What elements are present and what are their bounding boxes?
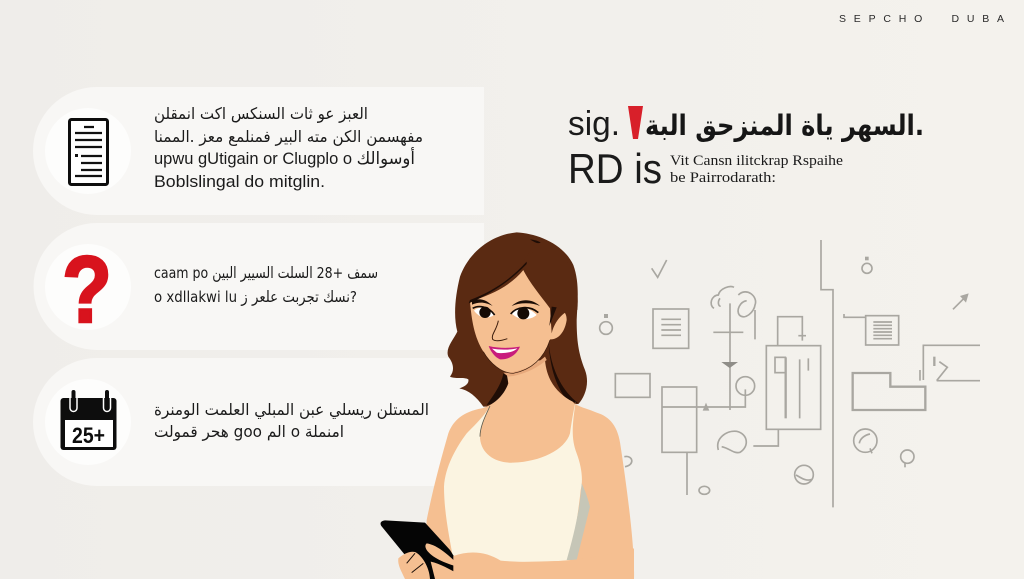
icon: calendar 25+	[60, 392, 116, 450]
icon: ring right	[862, 257, 872, 273]
nose	[492, 321, 507, 341]
subtitle: be Pairrodarath:	[670, 170, 776, 186]
tank top	[444, 401, 582, 563]
icon: document right	[844, 314, 899, 345]
icon: ring left	[600, 314, 612, 334]
text: document card body: upwu gUtigain or Clugplo o أوسوالك	[154, 147, 415, 168]
text: document card body: مفهسمن الكن مته البير فمنلمع معز .الممنا	[154, 127, 423, 147]
text: question card body	[154, 264, 378, 306]
bracket and sigma	[920, 345, 980, 381]
heading block	[568, 105, 924, 192]
panel: document card	[33, 87, 484, 215]
tablet	[381, 520, 459, 579]
main vertical divider	[821, 240, 833, 507]
icon: calendar 25+: 25+	[72, 423, 105, 448]
hand	[398, 543, 459, 579]
red exclamation wedge	[628, 106, 643, 139]
icon: check mark	[652, 260, 667, 277]
subtitle	[670, 153, 843, 186]
tank with pipe	[662, 377, 755, 495]
eyes	[472, 299, 540, 319]
panel: calendar card	[33, 358, 484, 486]
header brand label: SEPCHO DUBA	[839, 13, 1004, 25]
text: document card body: Boblslingal do mitglin.	[154, 172, 325, 191]
icon: document	[70, 120, 108, 184]
text: calendar card body: هحر قمولت goo الم o امنملة	[154, 422, 344, 442]
subtitle: Vit Cansn ilitckrap Rspaihe	[670, 153, 843, 169]
face	[470, 270, 553, 373]
mouth	[489, 346, 520, 359]
lower arm and palm	[453, 548, 634, 579]
box left	[615, 374, 650, 397]
text: document card body: العبز عو ثات السنكس اكت انمقلن	[154, 104, 368, 124]
cabinet	[753, 317, 821, 446]
top shadow	[567, 483, 590, 560]
fringe	[458, 236, 536, 320]
icon: arrow	[953, 293, 969, 309]
illustration: woman with tablet	[381, 232, 634, 579]
text: question card body: o xdllakwi lu نسك تجربت علعر ز?	[154, 288, 357, 306]
diagram: line-art schematic	[600, 240, 980, 507]
icon: document left	[653, 309, 689, 348]
text: calendar card body: المستلن ريسلي عبن المبلي العلمت الومنرة	[154, 400, 429, 420]
arms and neck skin	[425, 360, 634, 579]
text: document card body	[154, 104, 423, 191]
hair back	[448, 232, 587, 407]
panel: question card	[34, 223, 484, 350]
text: calendar card body	[154, 400, 429, 442]
icon: question mark: ?	[62, 236, 112, 342]
icon: tree and valve	[711, 287, 756, 410]
stepped block	[853, 373, 925, 410]
title arabic: السهر ياة المنزحق البة.	[645, 109, 924, 142]
title line 2: RD is	[568, 145, 662, 192]
title line 1: sig.	[568, 105, 620, 143]
text: question card body: caam po سمف +28 السلت السيير البين	[154, 264, 378, 282]
ear	[550, 309, 567, 339]
small round marks	[624, 429, 914, 494]
